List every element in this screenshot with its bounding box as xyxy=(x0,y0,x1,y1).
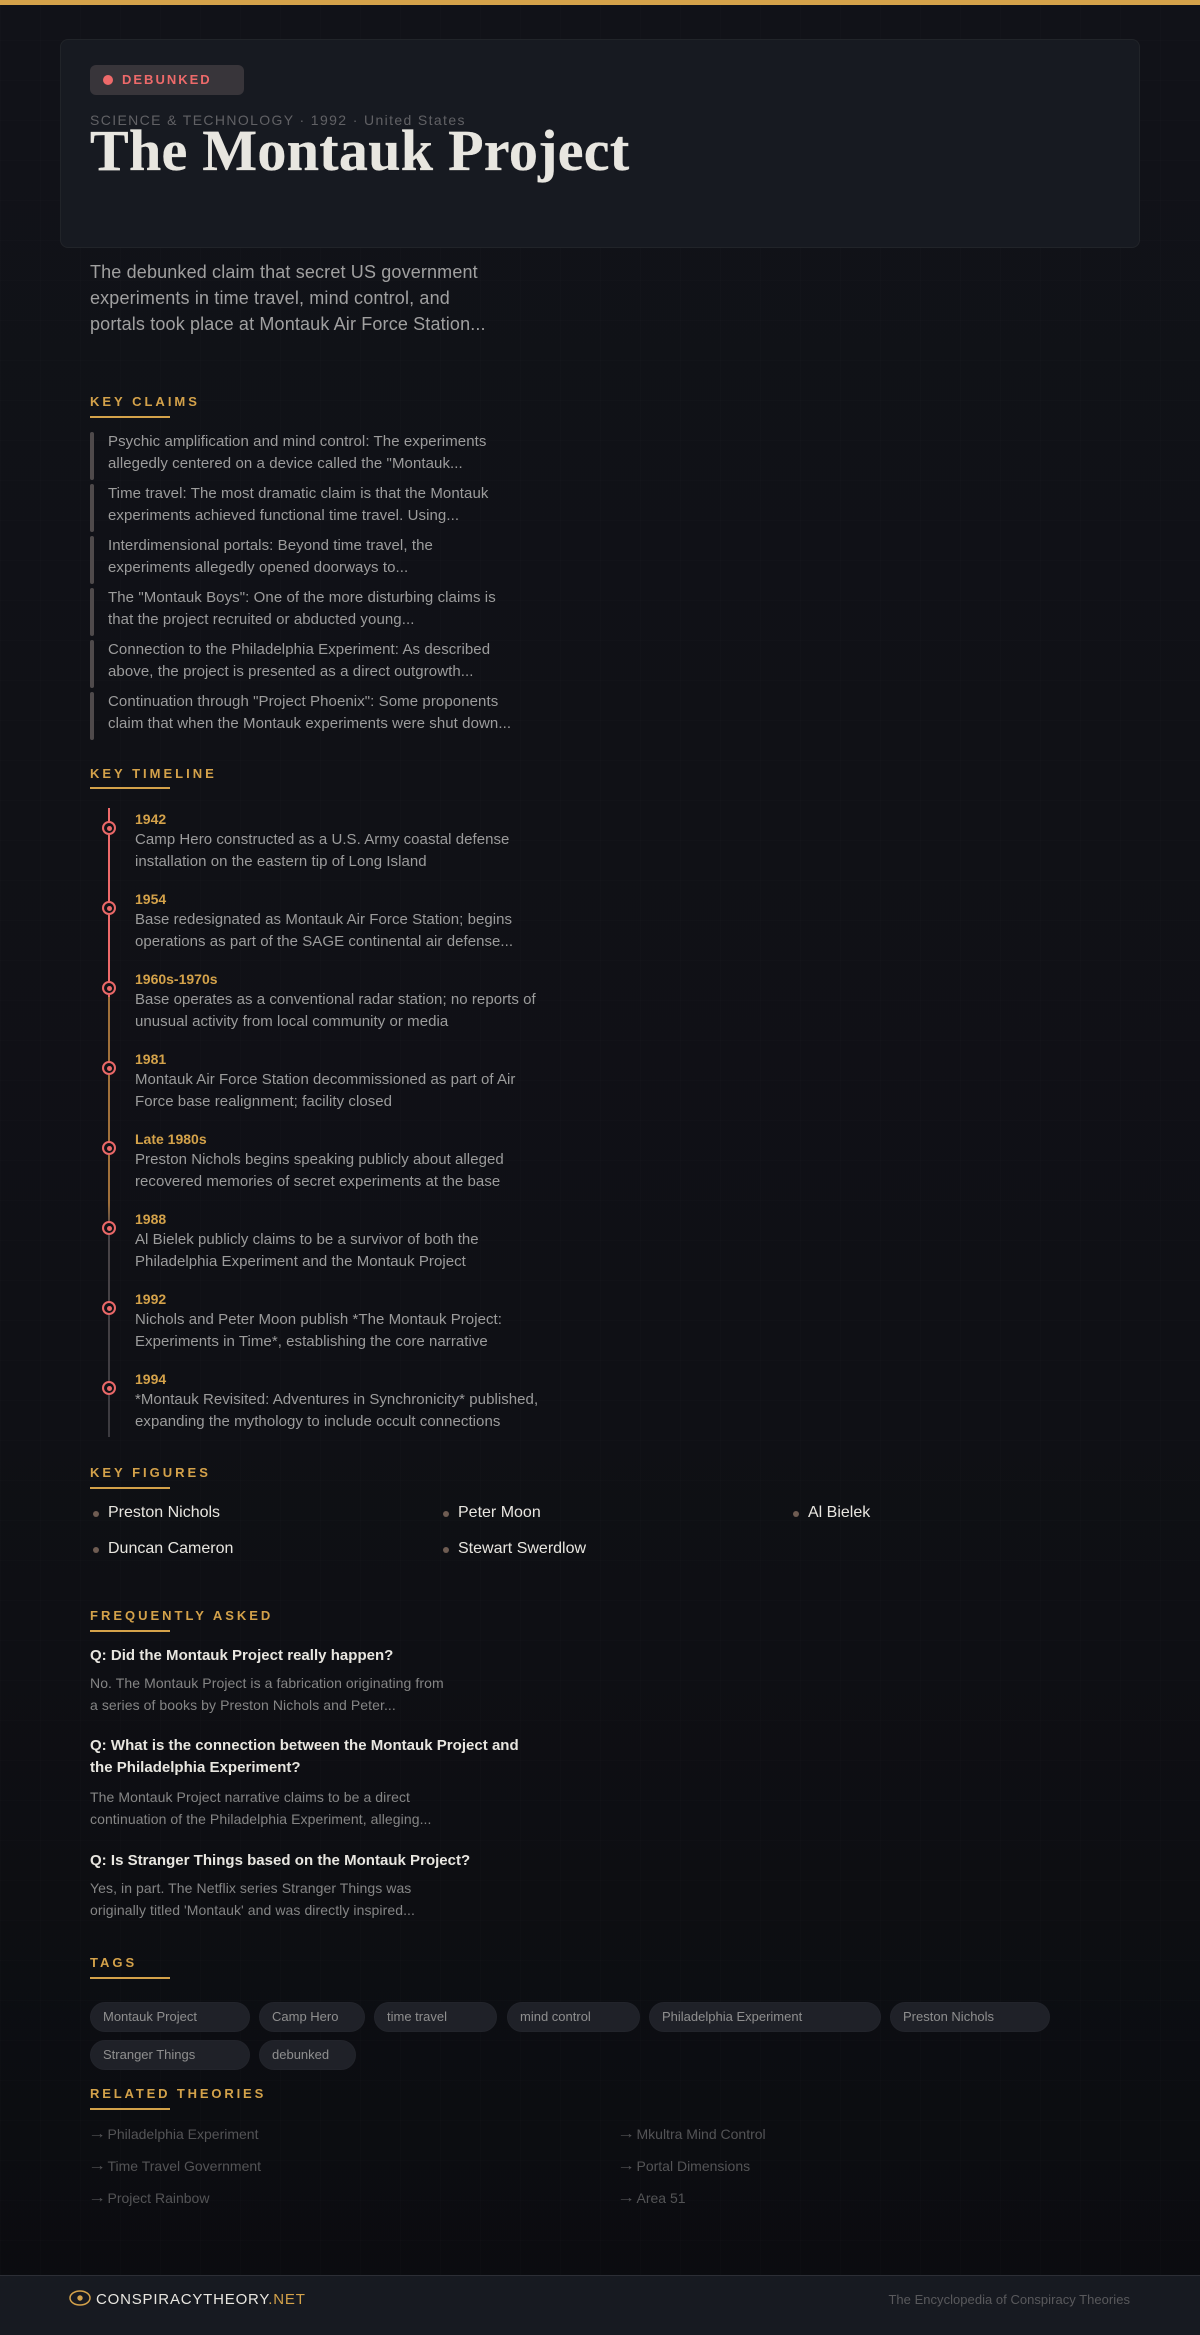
panel: frequently asked xyxy=(90,1608,519,1918)
event 1960s-1970s: unusual activity from local community or media xyxy=(135,1013,448,1030)
heading: KEY TIMELINE xyxy=(90,766,217,781)
event 1942: Camp Hero constructed as a U.S. Army coastal defense xyxy=(135,831,509,848)
event 1992: Nichols and Peter Moon publish *The Montauk Project: xyxy=(135,1311,502,1328)
claim 6: claim that when the Montauk experiments were shut down... xyxy=(108,715,511,732)
claim 1: allegedly centered on a device called the "Montauk... xyxy=(108,455,463,472)
heading: TAGS xyxy=(90,1955,137,1970)
event 1981: Force base realignment; facility closed xyxy=(135,1093,392,1110)
answer 2: The Montauk Project narrative claims to be a direct xyxy=(90,1789,410,1805)
title: The Montauk Project xyxy=(90,118,629,183)
tag xyxy=(259,2040,356,2070)
related link: → xyxy=(88,2189,106,2205)
claim 3: experiments allegedly opened doorways to... xyxy=(108,559,408,576)
claim 2 xyxy=(90,484,488,532)
lede paragraph: The debunked claim that secret US government xyxy=(90,262,478,282)
claim 3 xyxy=(90,536,433,584)
event 1992 xyxy=(102,1291,502,1350)
answer 3 xyxy=(90,1880,415,1918)
panel: related theories xyxy=(88,2086,766,2206)
tag: Preston Nichols xyxy=(903,2009,994,2024)
tag: debunked xyxy=(272,2047,329,2062)
event 1992: 1992 xyxy=(135,1291,166,1307)
related link: Mkultra Mind Control xyxy=(636,2126,766,2142)
related link: → xyxy=(617,2125,635,2141)
event 1994: 1994 xyxy=(135,1371,166,1387)
figure: Al Bielek: Al Bielek xyxy=(808,1504,870,1521)
panel: key figures xyxy=(90,1465,870,1557)
tag: time travel xyxy=(387,2009,447,2024)
heading underline xyxy=(90,2108,170,2110)
claim 3: Interdimensional portals: Beyond time travel, the xyxy=(108,537,433,554)
claim 4 xyxy=(90,588,496,636)
claim 2: experiments achieved functional time travel. Using... xyxy=(108,507,459,524)
tag: Camp Hero xyxy=(272,2009,338,2024)
question 1: Q: Did the Montauk Project really happen? xyxy=(90,1647,393,1664)
claim 4: that the project recruited or abducted young... xyxy=(108,611,414,628)
answer 1: No. The Montauk Project is a fabrication originating from xyxy=(90,1675,444,1691)
event 1994 xyxy=(102,1371,538,1430)
answer 2 xyxy=(90,1789,431,1827)
figure: Peter Moon: Peter Moon xyxy=(458,1504,541,1521)
tag: Montauk Project xyxy=(103,2009,197,2024)
event late 1980s xyxy=(102,1131,504,1190)
tag xyxy=(374,2002,497,2032)
tag xyxy=(649,2002,881,2032)
figure: Duncan Cameron: Duncan Cameron xyxy=(108,1540,233,1557)
event 1960s-1970s: 1960s-1970s xyxy=(135,971,218,987)
event late 1980s: recovered memories of secret experiments at the base xyxy=(135,1173,500,1190)
claim 2: Time travel: The most dramatic claim is that the Montauk xyxy=(108,485,488,502)
tag xyxy=(90,2002,250,2032)
event late 1980s: Preston Nichols begins speaking publicly about alleged xyxy=(135,1151,504,1168)
icon: status dot xyxy=(103,75,113,85)
answer 3: originally titled 'Montauk' and was directly inspired... xyxy=(90,1902,415,1918)
claim 1 xyxy=(90,432,486,480)
tag xyxy=(90,2040,250,2070)
heading underline xyxy=(90,1487,170,1489)
related link: → xyxy=(617,2157,635,2173)
heading: KEY FIGURES xyxy=(90,1465,211,1480)
related link: Time Travel Government xyxy=(108,2158,261,2174)
lede paragraph xyxy=(90,262,486,334)
question 2 xyxy=(90,1737,519,1776)
answer 3: Yes, in part. The Netflix series Stranger Things was xyxy=(90,1880,411,1896)
answer 1: a series of books by Preston Nichols and Peter... xyxy=(90,1697,396,1713)
related link: → xyxy=(88,2157,106,2173)
claim 6: Continuation through "Project Phoenix": Some proponents xyxy=(108,693,498,710)
related link xyxy=(617,2189,686,2206)
footer xyxy=(0,2275,1200,2335)
event 1981: 1981 xyxy=(135,1051,166,1067)
related link: → xyxy=(617,2189,635,2205)
event 1942: installation on the eastern tip of Long Island xyxy=(135,853,427,870)
event 1954: operations as part of the SAGE continental air defense... xyxy=(135,933,513,950)
heading underline xyxy=(90,787,170,789)
footer logo text: CONSPIRACYTHEORY.NET xyxy=(96,2291,306,2308)
tag: mind control xyxy=(520,2009,591,2024)
heading: FREQUENTLY ASKED xyxy=(90,1608,273,1623)
top accent bar xyxy=(0,0,1200,5)
tag: Stranger Things xyxy=(103,2047,195,2062)
related link: Portal Dimensions xyxy=(636,2158,750,2174)
panel: key claims xyxy=(90,394,511,740)
event 1981 xyxy=(102,1051,516,1110)
panel: header xyxy=(60,39,1140,248)
claim 1: Psychic amplification and mind control: The experiments xyxy=(108,433,486,450)
answer 1 xyxy=(90,1675,444,1713)
related link: Project Rainbow xyxy=(108,2190,209,2206)
footer tagline: The Encyclopedia of Conspiracy Theories xyxy=(888,2292,1130,2307)
event 1988 xyxy=(102,1211,479,1270)
related link: Area 51 xyxy=(636,2190,686,2206)
tag xyxy=(259,2002,365,2032)
related link: Philadelphia Experiment xyxy=(108,2126,258,2142)
panel: tags xyxy=(90,1955,1050,2070)
event 1954: Base redesignated as Montauk Air Force Station; begins xyxy=(135,911,512,928)
event 1988: 1988 xyxy=(135,1211,166,1227)
heading underline xyxy=(90,1977,170,1979)
event 1994: *Montauk Revisited: Adventures in Synchronicity* published, xyxy=(135,1391,538,1408)
related link: → xyxy=(88,2125,106,2141)
claim 5: Connection to the Philadelphia Experiment: As described xyxy=(108,641,490,658)
claim 4: The "Montauk Boys": One of the more disturbing claims is xyxy=(108,589,496,606)
tag xyxy=(507,2002,640,2032)
event 1994: expanding the mythology to include occult connections xyxy=(135,1413,500,1430)
event late 1980s: Late 1980s xyxy=(135,1131,207,1147)
event 1954: 1954 xyxy=(135,891,166,907)
heading underline xyxy=(90,416,170,418)
badge label: DEBUNKED xyxy=(122,72,212,87)
heading underline xyxy=(90,1630,170,1632)
claim 6 xyxy=(90,692,511,740)
figure: Preston Nichols: Preston Nichols xyxy=(108,1504,220,1521)
meta line: SCIENCE & TECHNOLOGY · 1992 · United States xyxy=(90,112,466,128)
heading: KEY CLAIMS xyxy=(90,394,200,409)
panel: key timeline xyxy=(90,766,538,1437)
answer 2: continuation of the Philadelphia Experiment, alleging... xyxy=(90,1811,431,1827)
event 1954 xyxy=(102,891,513,950)
question 2: the Philadelphia Experiment? xyxy=(90,1759,301,1776)
event 1942: 1942 xyxy=(135,811,166,827)
claim 5: above, the project is presented as a direct outgrowth... xyxy=(108,663,474,680)
tag: Philadelphia Experiment xyxy=(662,2009,802,2024)
event 1988: Philadelphia Experiment and the Montauk Project xyxy=(135,1253,466,1270)
timeline axis xyxy=(108,808,110,1437)
tag xyxy=(890,2002,1050,2032)
icon: eye logo xyxy=(69,2290,91,2306)
question 2: Q: What is the connection between the Montauk Project and xyxy=(90,1737,519,1754)
question 3: Q: Is Stranger Things based on the Montauk Project? xyxy=(90,1852,470,1869)
badge: debunked xyxy=(90,65,244,95)
event 1960s-1970s xyxy=(102,971,536,1030)
lede paragraph: experiments in time travel, mind control, and xyxy=(90,288,450,308)
figure: Stewart Swerdlow: Stewart Swerdlow xyxy=(458,1540,586,1557)
event 1960s-1970s: Base operates as a conventional radar station; no reports of xyxy=(135,991,536,1008)
event 1992: Experiments in Time*, establishing the core narrative xyxy=(135,1333,488,1350)
event 1988: Al Bielek publicly claims to be a survivor of both the xyxy=(135,1231,479,1248)
event 1942 xyxy=(102,811,509,870)
heading: RELATED THEORIES xyxy=(90,2086,266,2101)
event 1981: Montauk Air Force Station decommissioned as part of Air xyxy=(135,1071,515,1088)
claim 5 xyxy=(90,640,490,688)
lede paragraph: portals took place at Montauk Air Force Station... xyxy=(90,314,486,334)
